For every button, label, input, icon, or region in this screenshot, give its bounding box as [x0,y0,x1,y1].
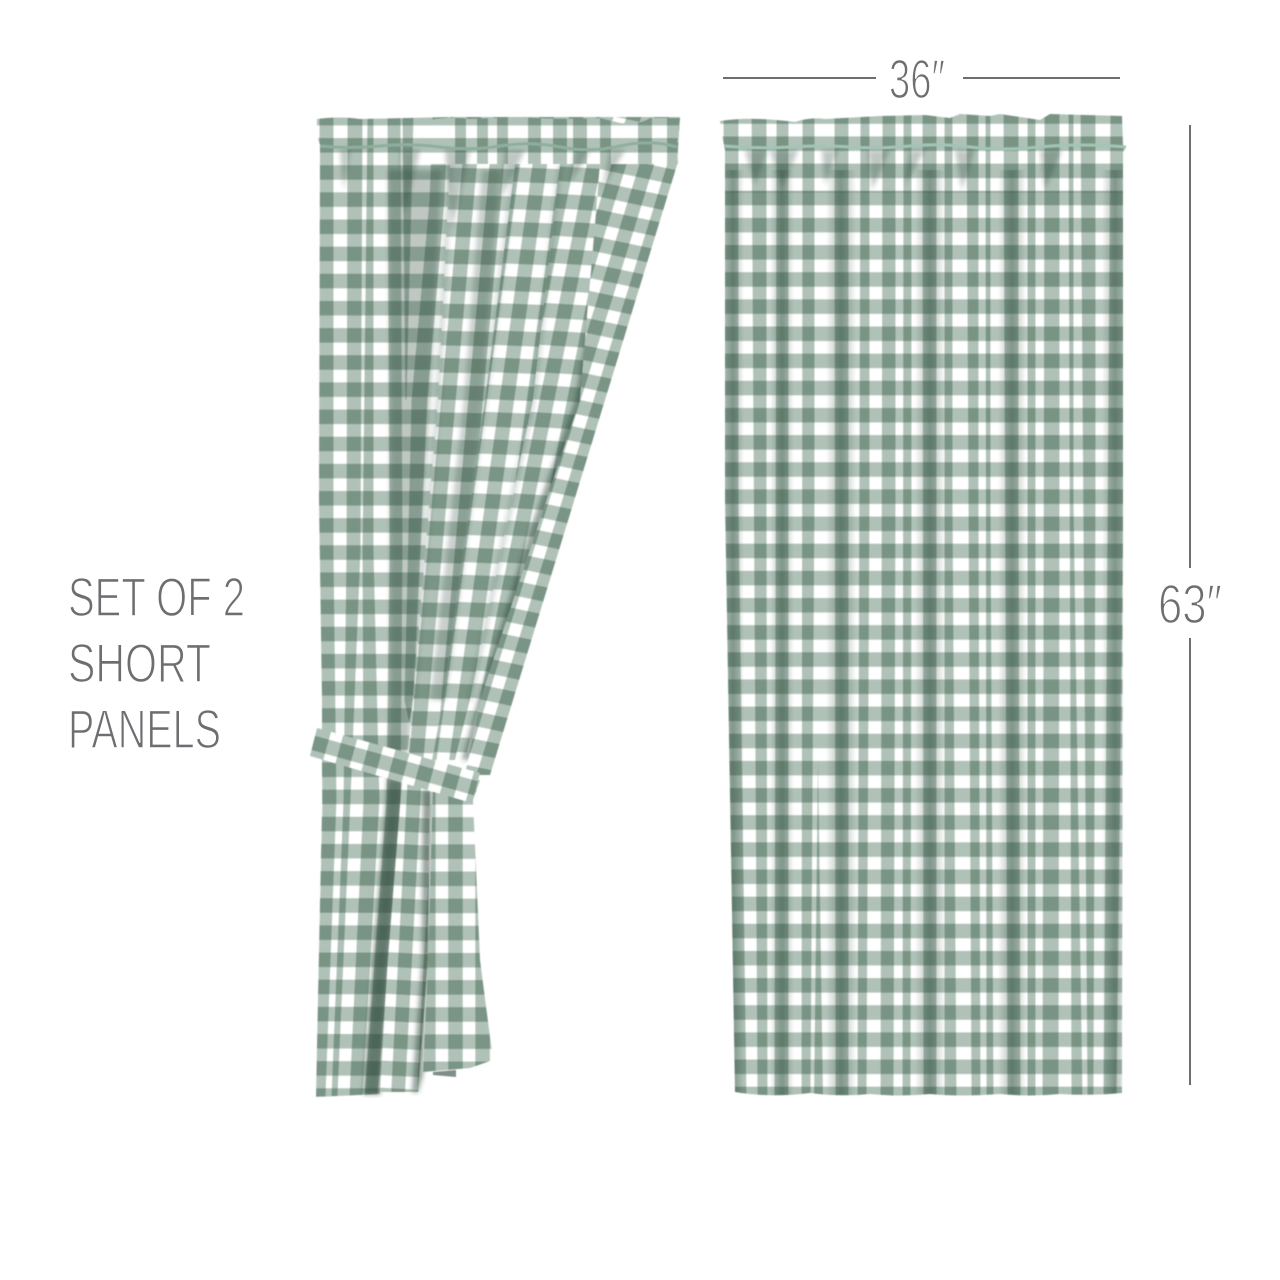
shadowed fold in flat section [363,170,442,1094]
lower fold F [423,780,493,1072]
width label: 36″ [889,48,945,110]
width line left [723,77,876,79]
drape fold C1 [432,117,560,760]
height line top [1189,125,1191,568]
dark seam shadow behind outer fold [462,200,608,760]
tieback belt [310,728,480,803]
casing stitch right curtain [724,145,1126,149]
gingham fabric right curtain [715,110,1130,1100]
shade on fold B [430,170,500,700]
text line: panels: PANELS [68,698,221,760]
text: set of 2 short panels [68,566,245,760]
header fold line [725,191,1123,193]
gathered header of left curtain [430,116,680,165]
dark fold shadow below tie [412,790,433,1092]
outer drape fold D [465,117,680,775]
text line: set of 2: SET OF 2 [68,566,245,628]
right curtain panel [715,110,1130,1100]
flat left section of curtain [315,116,450,1098]
gather shadows left curtain [340,150,625,230]
fold shading [722,170,1128,1100]
casing stitch left curtain [320,143,677,150]
text line: short: SHORT [68,632,211,694]
height line bottom [1189,638,1191,1085]
left curtain panel tied back [310,110,685,1100]
seam shadows between folds [413,165,560,700]
drape fold B [408,117,515,760]
gather shadows right curtain [745,150,1062,190]
drape fold C2 [455,117,600,760]
width line right [963,77,1120,79]
height label: 63″ [1158,573,1222,635]
under fold sliver [433,1070,456,1077]
lower fold E [380,770,430,1092]
deep fold below tie [364,780,403,1094]
